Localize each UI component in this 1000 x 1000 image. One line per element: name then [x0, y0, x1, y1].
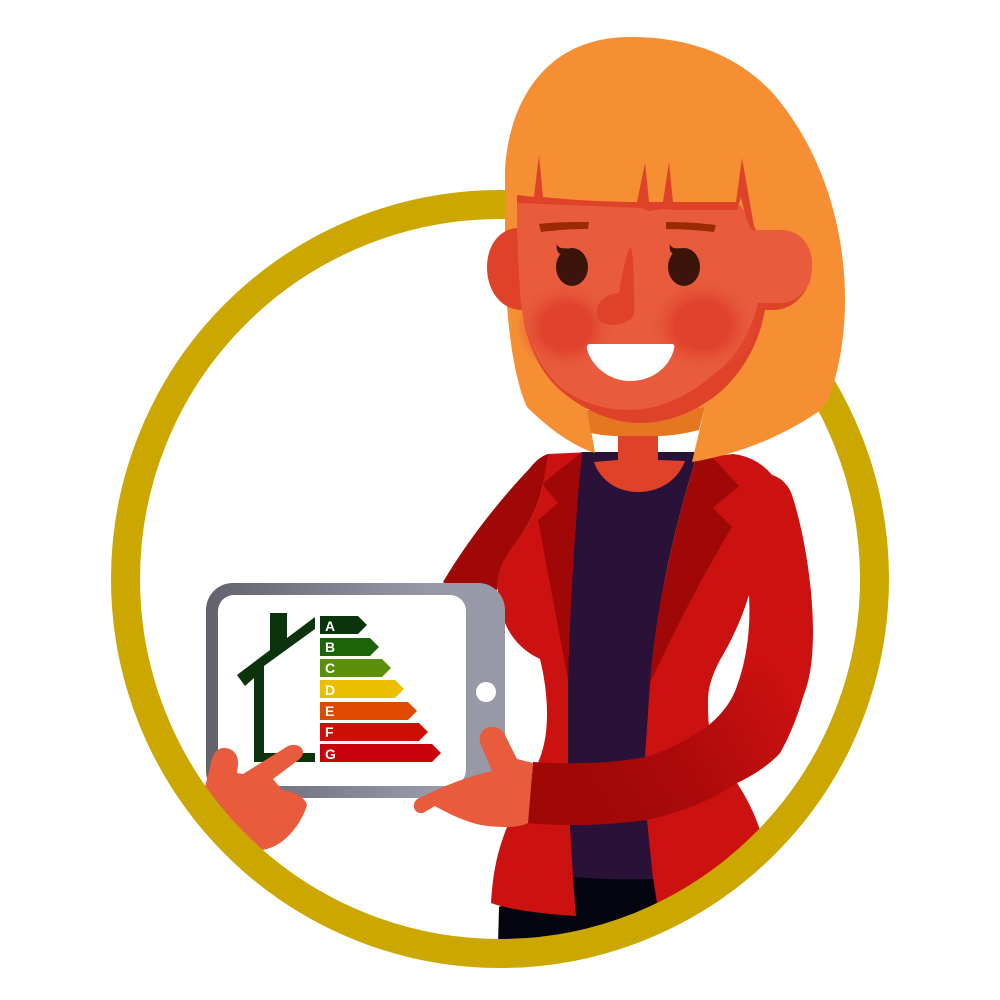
energy rating G [320, 744, 441, 762]
smile [587, 344, 674, 381]
jacket: left front panel [491, 452, 590, 916]
left hand pointing [205, 745, 307, 850]
left eye [556, 244, 588, 286]
energy rating A [320, 616, 367, 634]
left eyebrow [539, 222, 589, 232]
jacket: left dark sleeve [443, 454, 560, 600]
neck [594, 420, 685, 492]
fringe shadow [517, 155, 755, 232]
jacket: left lapel [538, 452, 582, 680]
gold ring [126, 204, 874, 954]
tablet [206, 583, 505, 798]
right eyebrow [666, 222, 716, 232]
hair [505, 37, 845, 462]
left ear [487, 228, 522, 310]
under-hair shadow [587, 407, 705, 436]
left cheek [516, 281, 616, 373]
energy rating D: D [325, 682, 335, 698]
energy rating B: B [325, 639, 335, 655]
right hand holding tablet [414, 727, 533, 827]
energy rating D [320, 680, 404, 698]
jacket: right front panel and arm [630, 454, 813, 915]
nose [597, 247, 634, 325]
energy rating E: E [325, 703, 334, 719]
energy rating G: G [325, 746, 336, 762]
energy rating E [320, 702, 417, 720]
energy rating F: F [325, 724, 334, 740]
jacket [443, 452, 813, 916]
tablet: frame [206, 583, 505, 798]
icon: house outline [237, 613, 315, 762]
jacket: right lapel [650, 452, 739, 683]
right eye [668, 244, 700, 286]
jacket lapels and sleeve [528, 452, 803, 825]
right ear [755, 230, 812, 310]
head [517, 195, 765, 423]
right cheek [647, 277, 757, 373]
energy rating C: C [325, 660, 335, 676]
jacket: sleeve across waist [528, 650, 803, 825]
shirt [568, 452, 698, 879]
tablet: screen [218, 595, 466, 786]
trousers [498, 870, 666, 945]
energy rating B [320, 638, 379, 656]
tablet: home button [476, 682, 496, 702]
energy rating A: A [325, 618, 335, 634]
energy rating C [320, 659, 391, 677]
face [517, 200, 758, 410]
energy rating F [320, 723, 428, 741]
